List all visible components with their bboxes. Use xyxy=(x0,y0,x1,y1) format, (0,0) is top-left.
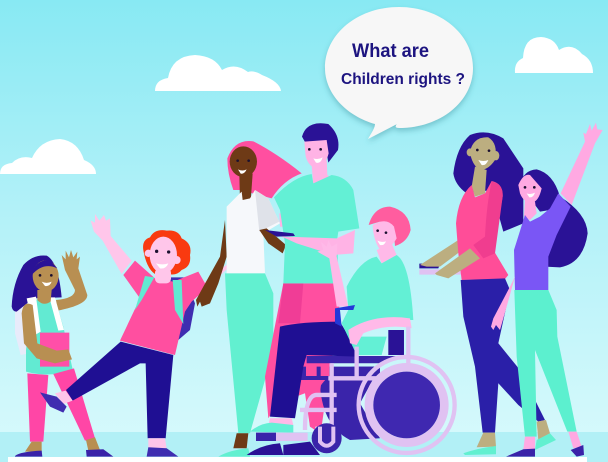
figure: person in wheelchair xyxy=(247,207,455,455)
foot and footrest xyxy=(268,418,293,425)
person xyxy=(270,322,357,418)
figure: man in teal shirt xyxy=(265,123,359,427)
cloud: top centre xyxy=(155,55,281,91)
wheelchair rear blob xyxy=(320,367,380,440)
figure: red-haired child waving xyxy=(40,214,252,457)
figure: small girl with book xyxy=(12,250,113,457)
cloud: left xyxy=(0,139,96,174)
question text: Children rights ? xyxy=(341,71,465,88)
speech bubble xyxy=(325,7,473,139)
cloud: top right xyxy=(515,37,593,73)
figure: woman with pink hair xyxy=(196,141,302,457)
figure: woman waving in purple shirt xyxy=(491,123,603,457)
figure: woman pushing wheelchair xyxy=(419,132,556,455)
handlebar xyxy=(419,264,440,268)
bottom white strip xyxy=(8,457,587,462)
question text: What are xyxy=(352,41,429,62)
question text xyxy=(341,41,465,88)
wheelchair frame xyxy=(300,327,455,453)
caster wheel xyxy=(312,423,342,453)
ground band xyxy=(0,432,608,462)
